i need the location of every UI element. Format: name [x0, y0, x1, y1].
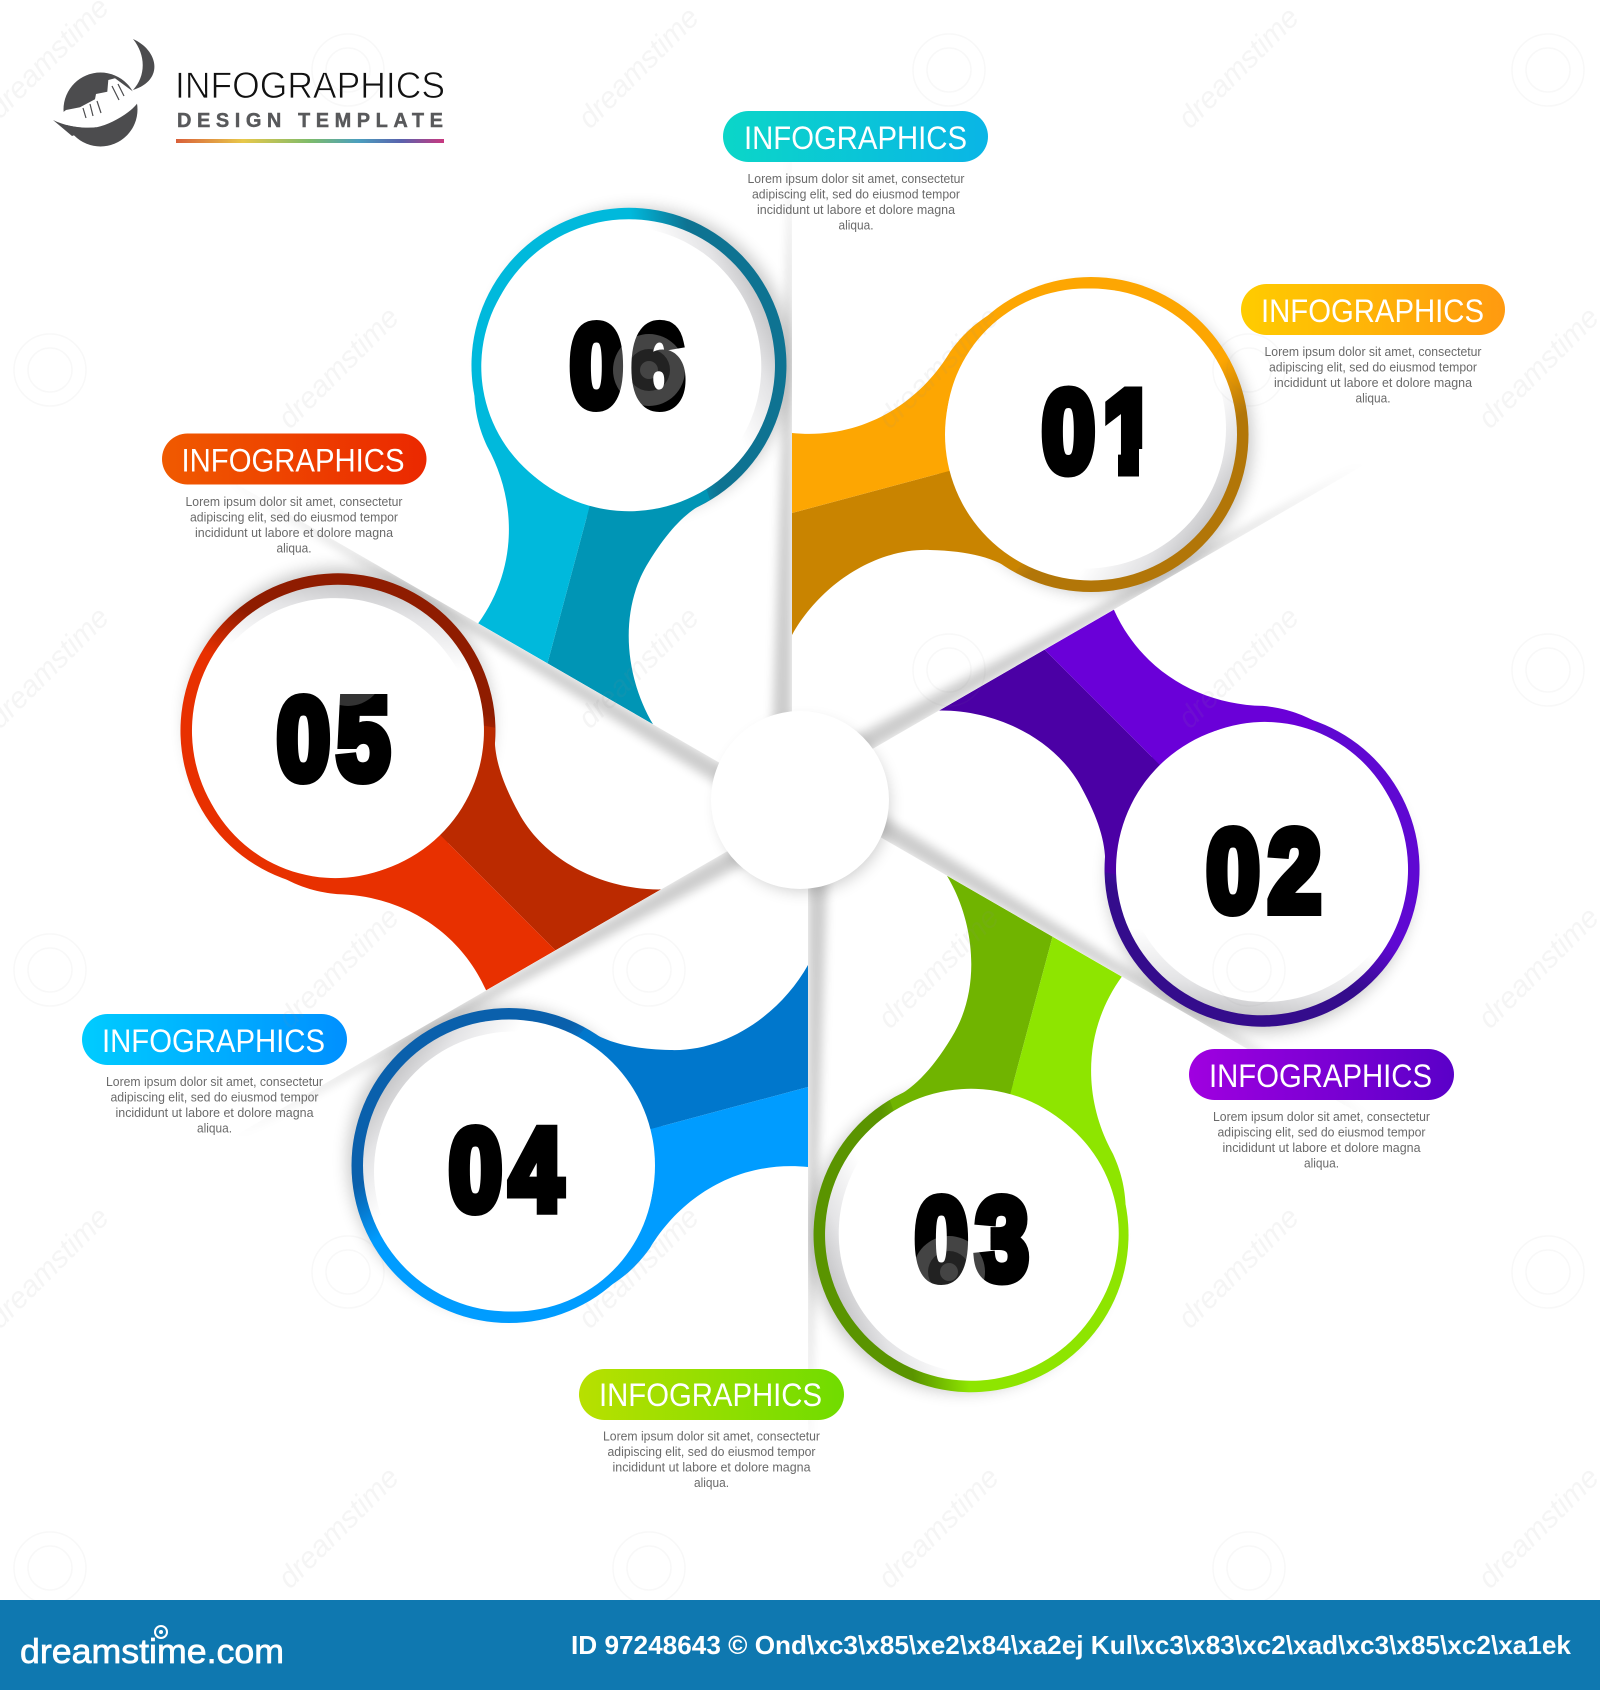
- callout 01: yellow label: Lorem ipsum dolor sit amet, consectetur: [1264, 345, 1482, 359]
- footer credit: ID 97248643 © Ond\xc3\x85\xe2\x84\xa2ej Kul\xc3\x83\xc2\xad\xc3\x85\xc2\xa1ek: [571, 1630, 1572, 1660]
- callout 05: red label: adipiscing elit, sed do eiusmod tempor: [190, 510, 398, 524]
- watermark wordmarks: dreamstime: [272, 301, 406, 435]
- watermark over numbers: [312, 334, 985, 1308]
- callout 02: purple label: [1189, 1049, 1454, 1170]
- petal 03: green: [808, 876, 1129, 1400]
- footer logo: dreamstime.com: [20, 1633, 284, 1671]
- logo icon: [53, 39, 154, 146]
- callout 06: teal label: adipiscing elit, sed do eiusmod tempor: [752, 188, 960, 202]
- callout 03: lime label: INFOGRAPHICS: [599, 1377, 822, 1413]
- footer bar: [0, 1600, 1600, 1690]
- callout 05: red label: Lorem ipsum dolor sit amet, consectetur: [186, 495, 402, 509]
- watermark wordmarks: dreamstime: [572, 601, 706, 735]
- watermark wordmarks: dreamstime: [272, 1461, 406, 1595]
- watermark wordmarks: dreamstime: [1172, 1201, 1306, 1335]
- callout 04: sky blue label: aliqua.: [197, 1122, 232, 1136]
- callout 03: lime label: [579, 1369, 844, 1490]
- callout 03: lime label: aliqua.: [694, 1476, 729, 1490]
- callout 04: sky blue label: Lorem ipsum dolor sit amet, consectetur: [106, 1075, 323, 1089]
- callout 02: purple label: INFOGRAPHICS: [1209, 1058, 1432, 1094]
- callout 01: yellow label: INFOGRAPHICS: [1261, 293, 1484, 329]
- watermark wordmarks: dreamstime: [1172, 1, 1306, 135]
- callout 04: sky blue label: INFOGRAPHICS: [102, 1023, 325, 1059]
- rainbow underline: [176, 139, 444, 143]
- number 05: 05: [277, 675, 390, 804]
- callout 03: lime label: Lorem ipsum dolor sit amet, consectetur: [603, 1430, 820, 1444]
- callout 04: sky blue label: adipiscing elit, sed do eiusmod tempor: [110, 1090, 318, 1104]
- callout 06: teal label: incididunt ut labore et dolore magna: [757, 203, 955, 217]
- petal 04: blue: [290, 852, 808, 1323]
- watermark wordmarks: dreamstime: [872, 901, 1006, 1035]
- callout 04: sky blue label: incididunt ut labore et dolore magna: [116, 1106, 314, 1120]
- callout 01: yellow label: aliqua.: [1356, 392, 1390, 406]
- callout 06: teal label: [723, 111, 988, 232]
- callout 03: lime label: incididunt ut labore et dolore magna: [612, 1460, 811, 1474]
- petal 01: orange: [792, 277, 1310, 749]
- callout 01: yellow label: incididunt ut labore et dolore magna: [1274, 376, 1472, 390]
- callout 05: red label: incididunt ut labore et dolore magna: [195, 526, 393, 540]
- watermark wordmarks: dreamstime: [572, 1201, 706, 1335]
- callout 01: yellow label: adipiscing elit, sed do eiusmod tempor: [1269, 360, 1477, 374]
- callout 05: red label: [162, 434, 426, 556]
- callout 06: teal label: INFOGRAPHICS: [744, 120, 967, 156]
- callout 01: yellow label: [1241, 284, 1505, 406]
- petal 05: red: [178, 510, 719, 990]
- subtitle: DESIGN TEMPLATE: DESIGN TEMPLATE: [177, 110, 443, 132]
- watermark wordmarks: dreamstime: [272, 901, 406, 1035]
- callout 02: purple label: adipiscing elit, sed do eiusmod tempor: [1218, 1126, 1426, 1140]
- callout 03: lime label: adipiscing elit, sed do eiusmod tempor: [608, 1445, 816, 1459]
- callout 02: purple label: incididunt ut labore et dolore magna: [1222, 1141, 1421, 1155]
- petal 02: purple: [881, 610, 1422, 1049]
- number 04: 04: [449, 1106, 563, 1235]
- watermark wordmarks: dreamstime: [872, 1461, 1006, 1595]
- title: INFOGRAPHICS: INFOGRAPHICS: [175, 65, 445, 106]
- number 02: 02: [1207, 807, 1321, 936]
- callout 02: purple label: Lorem ipsum dolor sit amet, consectetur: [1213, 1110, 1430, 1124]
- callout 02: purple label: aliqua.: [1304, 1156, 1339, 1170]
- callout 06: teal label: aliqua.: [838, 218, 874, 232]
- number 03: 03: [915, 1175, 1029, 1304]
- callout 05: red label: aliqua.: [276, 542, 312, 556]
- watermark wordmarks: dreamstime: [572, 1, 706, 135]
- watermark wordmarks: dreamstime: [872, 301, 1006, 435]
- number 06: 06: [570, 302, 685, 431]
- center hub: [711, 711, 889, 891]
- callout 04: sky blue label: [82, 1014, 347, 1136]
- petal 06: teal: [471, 200, 792, 724]
- number 01: 01: [1042, 368, 1156, 497]
- callout 06: teal label: Lorem ipsum dolor sit amet, consectetur: [748, 172, 964, 186]
- watermark wordmarks: dreamstime: [1172, 601, 1306, 735]
- callout 05: red label: INFOGRAPHICS: [182, 442, 404, 478]
